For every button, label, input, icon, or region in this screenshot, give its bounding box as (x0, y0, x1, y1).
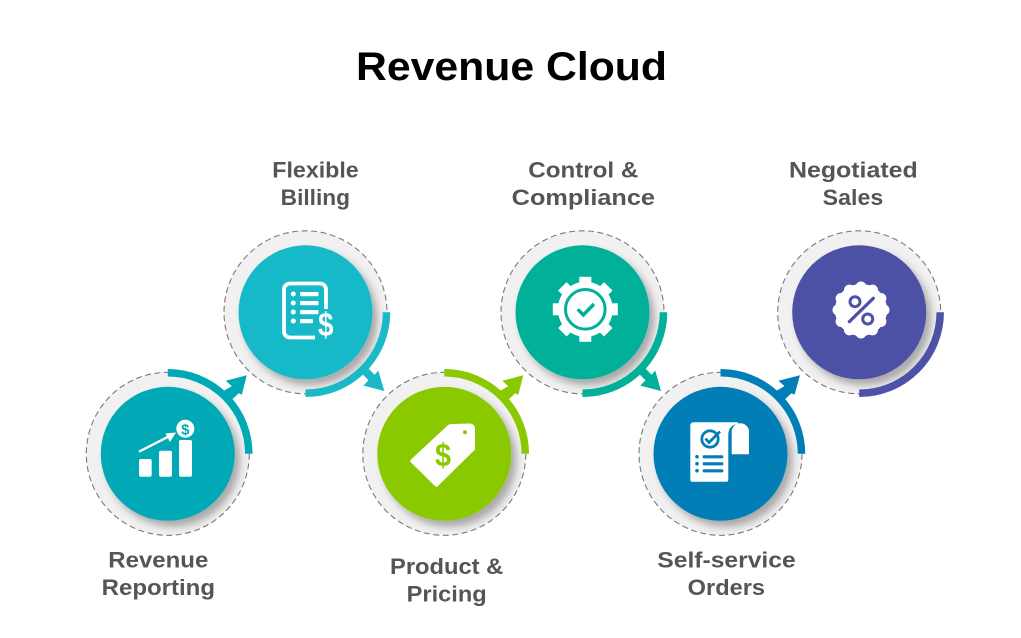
step 5: Self-service Orders (639, 372, 802, 600)
arrow: to Control and Compliance (500, 375, 523, 399)
icon: revenue chart: $ (181, 422, 190, 438)
label: Control and Compliance: Compliance (512, 185, 655, 210)
title: Revenue Cloud (356, 45, 667, 89)
label: Negotiated Sales: Sales (823, 185, 883, 210)
label: Flexible Billing: Billing (281, 185, 350, 210)
label: Control and Compliance: Control & (528, 157, 638, 182)
label: Self-service Orders: Orders (688, 575, 765, 600)
arrow: to Self-service Orders (638, 366, 661, 391)
label: Negotiated Sales: Negotiated (789, 157, 918, 182)
icon: price tag (410, 424, 475, 487)
label: Self-service Orders (657, 548, 796, 600)
icon: revenue chart (139, 420, 194, 477)
label: Revenue Reporting: Reporting (102, 575, 215, 600)
icon: discount badge (832, 282, 890, 338)
label: Product and Pricing: Pricing (407, 582, 487, 607)
label: Product and Pricing: Product & (390, 554, 503, 579)
icon: billing document (284, 284, 334, 343)
label: Control and Compliance (512, 157, 655, 210)
step 6: Negotiated Sales (778, 157, 941, 394)
step 2: Flexible Billing (224, 157, 387, 394)
icon: price tag: $ (435, 437, 451, 473)
step 3: Product and Pricing (363, 372, 526, 607)
label: Flexible Billing: Flexible (272, 157, 359, 182)
label: Product and Pricing (390, 554, 503, 607)
icon: billing document: $ (318, 306, 334, 343)
label: Self-service Orders: Self-service (657, 548, 796, 573)
step 4: Control and Compliance (501, 157, 664, 394)
step 1: Revenue Reporting (86, 372, 249, 600)
icon: order receipt (690, 422, 749, 482)
label: Flexible Billing (272, 157, 359, 210)
arrow: to Product and Pricing (360, 366, 384, 391)
arrow: to Negotiated Sales (776, 375, 800, 399)
label: Revenue Reporting: Revenue (108, 548, 208, 573)
arrow: to Flexible Billing (224, 375, 247, 399)
label: Revenue Reporting (102, 548, 215, 600)
label: Negotiated Sales (789, 157, 918, 210)
icon: compliance gear (553, 277, 618, 342)
